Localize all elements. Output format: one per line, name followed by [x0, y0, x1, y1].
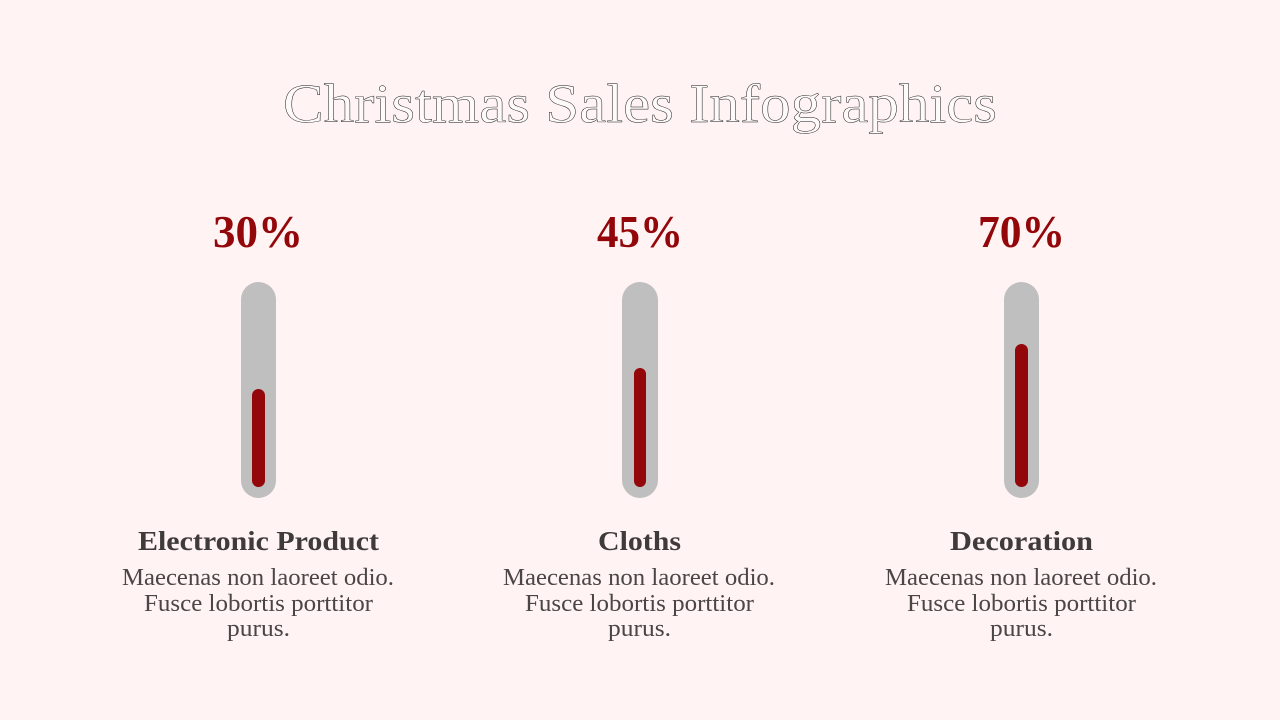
- percentage: 45%: 45%: [597, 207, 683, 257]
- description: decoration: Fusce lobortis porttitor: [907, 591, 1136, 617]
- gauge: 70%: [1004, 282, 1039, 498]
- panel: cloths: [503, 207, 775, 642]
- percentage: 30%: 30%: [213, 207, 303, 257]
- gauge: 30%: [241, 282, 276, 498]
- gauge: 45%: [622, 282, 658, 498]
- heading: decoration: Decoration: [950, 526, 1093, 556]
- description: cloths: Fusce lobortis porttitor: [525, 591, 754, 617]
- description: decoration: purus.: [990, 616, 1053, 642]
- description: electronic product: Maecenas non laoreet odio.: [122, 565, 394, 591]
- percentage: 70%: 70%: [978, 207, 1065, 257]
- description: decoration: Maecenas non laoreet odio.: [885, 565, 1157, 591]
- description: electronic product: purus.: [227, 616, 290, 642]
- heading: electronic product: Electronic Product: [138, 526, 379, 556]
- description: electronic product: [122, 565, 394, 642]
- heading: cloths: Cloths: [598, 526, 681, 556]
- description: cloths: [503, 565, 775, 642]
- description: electronic product: Fusce lobortis porttitor: [144, 591, 373, 617]
- panel: electronic product: [122, 207, 394, 642]
- panel: decoration: [885, 207, 1157, 642]
- description: cloths: Maecenas non laoreet odio.: [503, 565, 775, 591]
- description: decoration: [885, 565, 1157, 642]
- description: cloths: purus.: [608, 616, 671, 642]
- title: Christmas Sales Infographics: [283, 73, 997, 134]
